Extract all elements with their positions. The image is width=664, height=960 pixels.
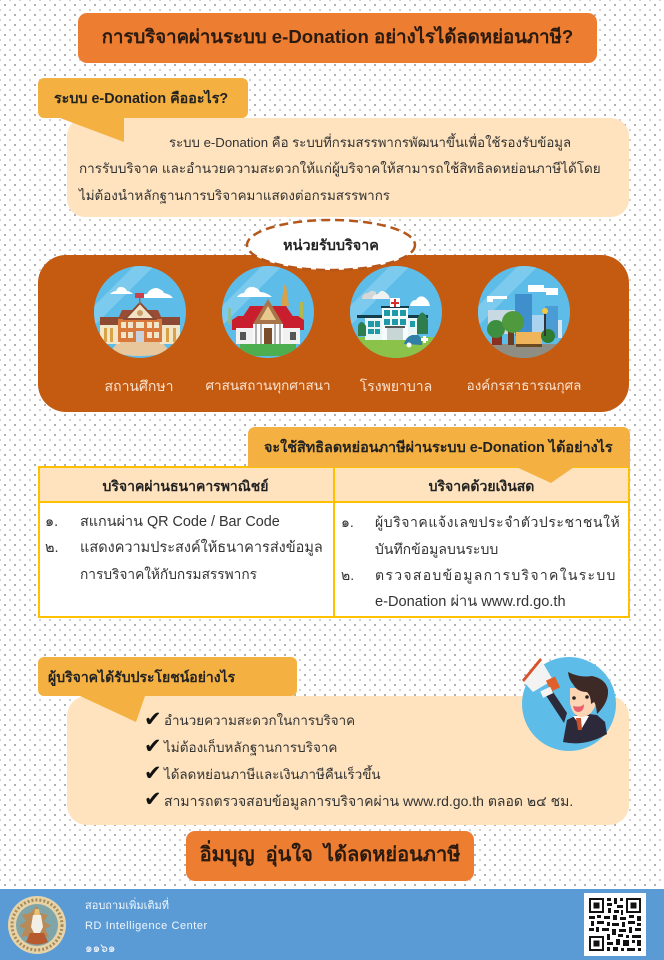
icon: school <box>94 266 186 358</box>
bank step 2 <box>45 538 323 556</box>
heading text: ระบบ e-Donation คืออะไร? <box>54 91 228 107</box>
definition line 3: ไม่ต้องนำหลักฐานการบริจาคมาแสดงต่อกรมสรรพากร <box>79 188 390 203</box>
table header row <box>40 468 628 503</box>
benefit 4: ✔ <box>144 788 162 811</box>
benefit 1: อำนวยความสะดวกในการบริจาค <box>164 713 355 728</box>
definition line 2: การรับบริจาค และอำนวยความสะดวกให้แก่ผู้บริจาคให้สามารถใช้สิทธิลดหย่อนภาษีได้โดย <box>79 161 601 176</box>
bank step 1: ๑. <box>45 514 58 530</box>
callout tail <box>516 467 574 483</box>
label: public charities: องค์กรสาธารณกุศล <box>467 378 581 393</box>
column divider <box>333 468 335 616</box>
callout heading text: จะใช้สิทธิลดหย่อนภาษีผ่านระบบ e-Donation ได้อย่างไร <box>264 440 613 456</box>
panel: how to use <box>38 427 630 618</box>
cash step 2 <box>341 567 617 584</box>
benefits body panel <box>67 696 629 825</box>
icon: hospital <box>350 266 442 358</box>
cash step 2 continued: e-Donation ผ่าน www.rd.go.th <box>375 594 566 610</box>
label: hospitals: โรงพยาบาล <box>360 378 432 394</box>
callout heading <box>248 427 630 467</box>
title banner <box>78 13 597 63</box>
benefit 3: ✔ <box>144 762 162 785</box>
closing banner text: อิ่มบุญ อุ่นใจ ได้ลดหย่อนภาษี <box>200 844 460 866</box>
panel: how to use: สแกนผ่าน QR Code / Bar Code <box>80 514 280 530</box>
icon: temple <box>222 266 314 358</box>
cash step 2: ๒. <box>341 567 354 583</box>
footer line 3: ๑๑๖๑ <box>85 941 115 955</box>
callout tail <box>60 118 124 142</box>
panel: donation recipients <box>38 255 629 412</box>
cash step 1: ๑. <box>341 514 354 530</box>
callout heading text: ผู้บริจาคได้รับประโยชน์อย่างไร <box>48 669 235 685</box>
callout heading <box>38 657 297 696</box>
bank step 2: ๒. <box>45 540 59 556</box>
title text: การบริจาคผ่านระบบ e-Donation อย่างไรได้ลดหย่อนภาษี? <box>102 26 573 47</box>
footer line 1: สอบถามเพิ่มเติมที่ <box>85 900 169 912</box>
panel: how to use: ตรวจสอบข้อมูลการบริจาคในระบบ <box>375 567 617 583</box>
panel: how to use: แสดงความประสงค์ให้ธนาคารส่งข้อมูล <box>80 540 323 556</box>
benefit 3: ได้ลดหย่อนภาษีและเงินภาษีคืนเร็วขึ้น <box>164 767 381 782</box>
recipients heading text: หน่วยรับบริจาค <box>283 238 379 254</box>
benefit 2 <box>144 735 337 758</box>
bank step 1 <box>45 514 280 530</box>
benefit 4: สามารถตรวจสอบข้อมูลการบริจาคผ่าน www.rd.go.th ตลอด ๒๔ ชม. <box>164 793 573 809</box>
panel: what is e-Donation <box>38 78 629 217</box>
label: schools: สถานศึกษา <box>105 378 173 394</box>
icon: businessman with megaphone <box>522 657 616 751</box>
bank step 2 continued: การบริจาคให้กับกรมสรรพากร <box>80 567 257 582</box>
icon: revenue department seal <box>8 896 66 954</box>
benefit 2: ไม่ต้องเก็บหลักฐานการบริจาค <box>164 740 337 755</box>
benefit 4 <box>144 788 573 811</box>
definition body panel <box>67 118 629 217</box>
recipients heading oval <box>246 218 416 271</box>
closing banner <box>186 831 474 881</box>
cash step 1 <box>341 514 620 531</box>
table <box>38 466 630 618</box>
cash step 1 continued: บันทึกข้อมูลบนระบบ <box>375 541 498 557</box>
label: religious places: ศาสนสถานทุกศาสนา <box>205 378 331 393</box>
callout tail <box>80 696 145 722</box>
column heading: bank: บริจาคผ่านธนาคารพาณิชย์ <box>102 478 268 494</box>
benefit 1 <box>144 708 355 731</box>
benefit 2: ✔ <box>144 735 162 758</box>
benefit 3 <box>144 762 381 785</box>
column heading: cash: บริจาคด้วยเงินสด <box>429 478 534 494</box>
panel: how to use: ผู้บริจาคแจ้งเลขประจำตัวประชาชนให้ <box>375 514 620 530</box>
footer <box>0 889 664 960</box>
benefit 1: ✔ <box>144 708 162 731</box>
QR code <box>584 893 646 956</box>
definition line 1: ระบบ e-Donation คือ ระบบที่กรมสรรพากรพัฒนาขึ้นเพื่อใช้รองรับข้อมูล <box>169 135 571 150</box>
callout heading <box>38 78 248 118</box>
panel: donor benefits <box>38 657 629 825</box>
icon: public charity park <box>478 266 570 358</box>
footer line 2: RD Intelligence Center <box>85 920 208 932</box>
